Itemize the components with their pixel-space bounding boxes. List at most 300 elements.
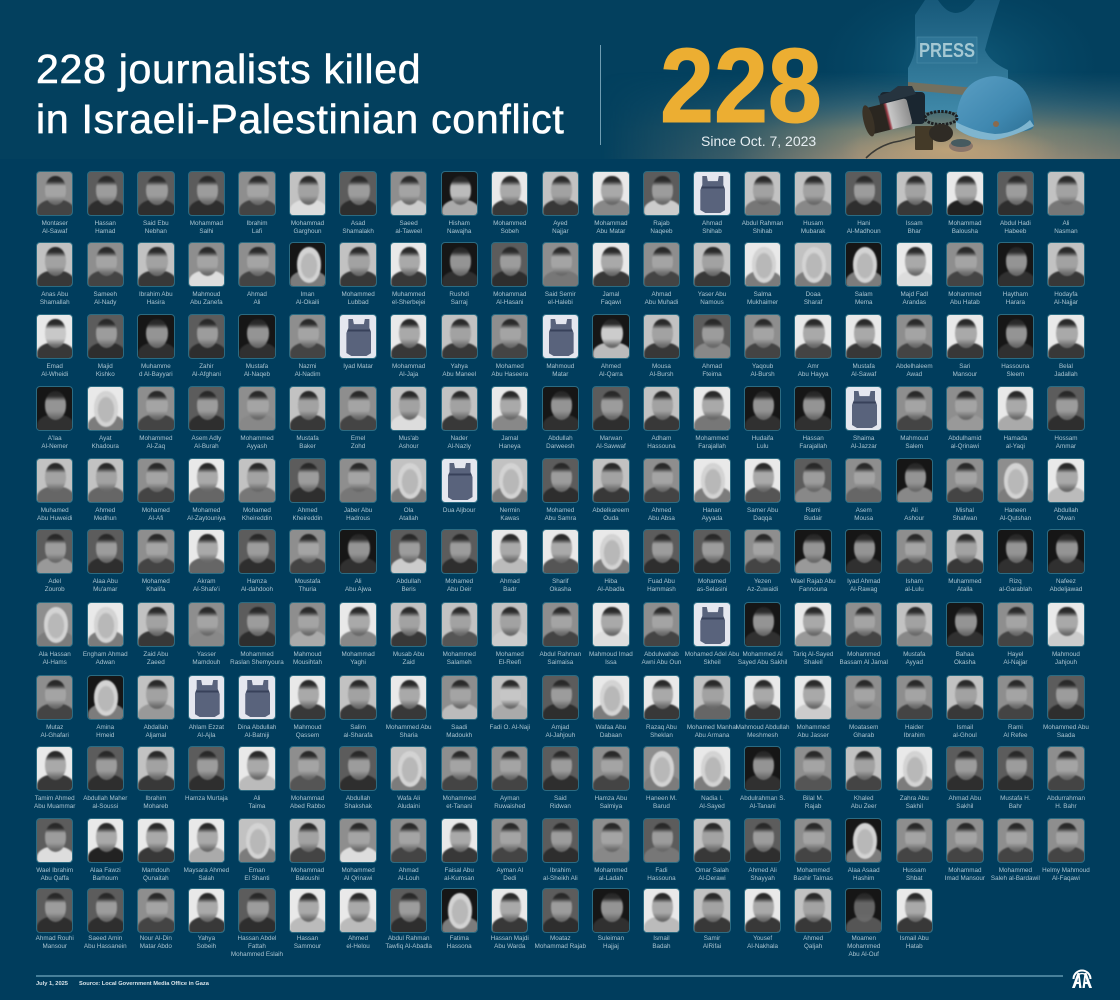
- card: Abdullah Olwan: Olwan: [1057, 515, 1075, 522]
- card: Ahmed el-Helou: el-Helou: [346, 943, 370, 950]
- card: Muhammed Atalla: Muhammed: [948, 578, 981, 585]
- card: Mohammed Abu Sharia: Sharia: [400, 732, 418, 739]
- card: Alaa Fawzi Barhoum: Alaa Fawzi: [90, 867, 121, 874]
- card: Asem Adly Al-Burah: Asem Adly: [192, 435, 221, 442]
- card: Ali Taima: Ali: [253, 795, 260, 802]
- card: Amjad Al-Jahjouh: Al-Jahjouh: [545, 732, 575, 739]
- header scene: press vest, helmet, camera on sand: [622, 0, 1120, 159]
- card: Dina Abdullah Al-Batniji: [238, 675, 276, 740]
- card: Mustafa H. Bahr: [997, 746, 1034, 811]
- card: Abdulhamid al-Qrinawi: Abdulhamid: [948, 435, 981, 442]
- card: Yasser Mamdouh: [188, 602, 225, 667]
- card: Samir AlRifai: [693, 888, 731, 959]
- card: Ahmed Abu Absa: Ahmed: [651, 507, 671, 514]
- card: Suleiman Hajjaj: Hajjaj: [603, 943, 619, 950]
- card: Anas Abu Shamallah: [36, 242, 73, 306]
- card: Engham Ahmad Adwan: Engham Ahmad: [83, 651, 128, 658]
- card: Maysara Ahmed Salah: Maysara Ahmed: [184, 867, 229, 874]
- card: Mahmoud Abdullah Meshmesh: Meshmesh: [747, 732, 778, 739]
- card: Husam Mubarak: Husam: [803, 220, 823, 227]
- card: Yezen Az-Zuwaidi: Az-Zuwaidi: [747, 586, 778, 593]
- card: Fatima Hassona: Hassona: [447, 943, 472, 950]
- card: Hussam Shbat: [896, 818, 933, 883]
- card: Rajab Naqeeb: Naqeeb: [650, 228, 672, 235]
- card: Mohammed Abu Jasser: Mohammed: [797, 724, 830, 731]
- card: Abdurrahman H. Bahr: Abdurrahman: [1047, 795, 1085, 802]
- card: Ali Abu Ajwa: [339, 529, 377, 594]
- card: Hassan Abdel Fattah Mohammed Eslaih: Fattah: [248, 943, 266, 950]
- card: Ahmad Abu Sakhil: Ahmad Abu: [949, 795, 981, 802]
- card: Hiba Al-Abadla: [592, 529, 630, 594]
- card: Asad Shamalakh: Shamalakh: [342, 228, 374, 235]
- card: Ahmad Al-Louh: Ahmad: [399, 867, 419, 874]
- card: Abdul Rahman Saimaisa: Abdul Rahman: [540, 651, 581, 658]
- card: Ayat Khadoura: [87, 386, 124, 451]
- card: Mutaz Al-Ghafari: [36, 675, 73, 740]
- card: Salim al-Sharafa: al-Sharafa: [344, 732, 373, 739]
- card: Sameeh Al-Nady: [87, 242, 124, 306]
- journalists row 2: [36, 242, 1085, 306]
- card: Mustafa H. Bahr: Mustafa H.: [1000, 795, 1031, 802]
- card: Eman El Shanti: El Shanti: [244, 875, 270, 882]
- card: Hassan Abdel Fattah Mohammed Eslaih: Hassan Abdel: [238, 935, 276, 942]
- card: Ayman Ruwaished: [491, 746, 528, 811]
- card: Mohammed Farajallah: Mohammed: [695, 435, 729, 442]
- card: A'laa Al-Nemer: [36, 386, 73, 451]
- card: Ayed Najjar: Ayed: [553, 220, 567, 227]
- card: Hisham Nawajha: Nawajha: [447, 228, 471, 235]
- card: Hassouna Sleem: Hassouna: [1001, 363, 1030, 370]
- card: Faisal Abu al-Kumsan: al-Kumsan: [444, 875, 474, 882]
- card: Mohammed Saleh al-Bardawil: [997, 818, 1034, 883]
- card: Muhammed Atalla: Atalla: [957, 586, 973, 593]
- card: Hisham Nawajha: [441, 171, 478, 235]
- card: Abdullah Beris: [390, 529, 427, 594]
- card: Salma Mukhaimer: Mukhaimer: [747, 299, 778, 306]
- card: Hossam Ammar: [1047, 386, 1085, 451]
- card: Abdullah Darweesh: Abdullah: [548, 435, 573, 442]
- card: Said Ridwan: [542, 746, 579, 811]
- card: Salam Mema: Mema: [855, 299, 872, 306]
- card: Ahmad Abu Muhadi: Abu Muhadi: [645, 299, 678, 306]
- card: Mohammed Salameh: [440, 602, 478, 667]
- card: Ahmed el-Helou: Ahmed: [348, 935, 368, 942]
- card: Hassan Majdi Abu Warda: [491, 888, 528, 959]
- card: Akram Al-Shafe'i: Al-Shafe'i: [193, 586, 220, 593]
- card: Isham al-Lulu: [896, 529, 933, 594]
- card: Ahmed Al-Qarra: [592, 314, 630, 379]
- card: Amr Abu Hayya: [794, 314, 832, 379]
- card: Ayat Khadoura: Ayat: [99, 435, 112, 442]
- card: Mahmoud Abu Zanefa: Abu Zanefa: [190, 299, 223, 306]
- card: Omar Salah Al-Derawi: Omar Salah: [695, 867, 729, 874]
- card: Haneen Al-Qutshan: [997, 458, 1034, 523]
- card: Said Semir el-Halebi: [542, 242, 579, 306]
- card: Ahmed Medhun: Ahmed: [95, 507, 115, 514]
- card: Mahmoud Mousihtah: [289, 602, 326, 667]
- card: Mohamed as-Selasini: Mohamed: [698, 578, 726, 585]
- footer source: Source: Local Government Media Office in Gaza: [79, 981, 209, 987]
- card: Ola Atallah: [390, 458, 427, 523]
- card: Mohammed Sobeh: [491, 171, 528, 235]
- card: Husam Mubarak: [794, 171, 832, 235]
- card: Mahmoud Salem: Salem: [905, 443, 923, 450]
- card: Mohammed Abu Saada: Mohammed Abu: [1043, 724, 1089, 731]
- card: Abdelhaleem Awad: Awad: [906, 371, 922, 378]
- card: Jamal Faqawi: [592, 242, 630, 306]
- card: Hani Al-Madhoun: Hani: [857, 220, 870, 227]
- card: Abdullah Maher al-Soussi: al-Soussi: [92, 803, 118, 810]
- card: Tariq Al-Sayed Shaleil: [794, 602, 832, 667]
- icon: compass: [949, 139, 973, 152]
- card: Fadi Hassouna: Hassouna: [647, 875, 676, 882]
- card: Mishal Shafwan: Shafwan: [953, 515, 977, 522]
- card: Bilal M. Rajab: Rajab: [805, 803, 821, 810]
- card: Mohammad Baloushi: [289, 818, 326, 883]
- card: Mustafa Al-Sawaf: Al-Sawaf: [851, 371, 876, 378]
- card: Ali Nasman: [1047, 171, 1085, 235]
- card: Mustafa H. Bahr: Bahr: [1009, 803, 1022, 810]
- card: A'laa Al-Nemer: A'laa: [48, 435, 62, 442]
- card: Ahmed Kheireddin: Ahmed: [298, 507, 317, 514]
- card: Muhammed Al-Bayyari: Muhamme: [141, 363, 171, 370]
- card: Yahya Sobeih: [188, 888, 225, 959]
- card: Nader Al-Nazly: [440, 386, 478, 451]
- card: Hassan Majdi Abu Warda: Hassan Majdi: [491, 935, 529, 942]
- card: Ahmed Ali Shayyah: [744, 818, 781, 883]
- card: Said Semir el-Halebi: el-Halebi: [548, 299, 573, 306]
- card: Moamen Mohammed Abu Al-Ouf: Abu Al-Ouf: [848, 951, 879, 958]
- card: Mohammad Abu Matar: Abu Matar: [596, 228, 625, 235]
- card: Moataz Mohammad Rajab: Moataz: [550, 935, 571, 942]
- card: Hamza Al-dahdooh: [238, 529, 276, 594]
- card: Mohammed Abu Jasser: [794, 675, 832, 740]
- card: Moatasem Gharab: [845, 675, 882, 740]
- card: Mohammed Raslan Shemyoura: Mohammed: [240, 651, 274, 658]
- card: Ola Atallah: Atallah: [399, 515, 418, 522]
- card: Akram Al-Shafe'i: Akram: [197, 578, 215, 585]
- journalists row 11: [36, 888, 1106, 959]
- card: Mohammad Abu Matar: Mohammad: [594, 220, 628, 227]
- card: Moataz Mohammad Rajab: Mohammad Rajab: [535, 943, 586, 950]
- card: Ahmad Shihab: Shihab: [702, 228, 722, 235]
- card: Mohamed El-Reefi: Mohamed: [496, 651, 524, 658]
- card: Muhammed el-Sherbejei: Muhammed: [392, 291, 425, 298]
- card: Abdullah Beris: Abdullah: [396, 578, 421, 585]
- card: Mohammad Abed Rabbo: Mohammad: [291, 795, 324, 802]
- card: Haytham Harara: Harara: [1006, 299, 1025, 306]
- card: Helmy Mahmoud Al-Faqawi: Al-Faqawi: [1052, 875, 1080, 882]
- card: Suleiman Hajjaj: [592, 888, 630, 959]
- card: Hassan Farajallah: Farajallah: [799, 443, 827, 450]
- card: Mohammed et-Tanani: [440, 746, 478, 811]
- card: Nafeez Abdeljawad: Abdeljawad: [1050, 586, 1082, 593]
- card: Zahir Al-Afghani: [188, 314, 225, 379]
- card: Wael Ibrahim Abu Qaffa: [36, 818, 73, 883]
- card: Mohammad Balousha: [946, 171, 984, 235]
- card: Mohammed Bassam Al Jamal: Bassam Al Jamal: [840, 659, 888, 666]
- card: Mahmoud Matar: Mahmoud: [546, 363, 574, 370]
- card: Mohamed Al-Zaytouniya: Al-Zaytouniya: [187, 515, 226, 522]
- card: Yahya Sobeih: Sobeih: [197, 943, 216, 950]
- card: Ahmad Abu Sakhil: [946, 746, 984, 811]
- card: Ali Nasman: Ali: [1062, 220, 1069, 227]
- card: Saeed al-Taweel: [390, 171, 427, 235]
- card: Ahmad Abu Muhadi: Ahmad: [651, 291, 671, 298]
- card: Ahmed Qaljah: Qaljah: [804, 943, 822, 950]
- card: Hassan Hamad: Hamad: [95, 228, 115, 235]
- card: Abdelkareem Ouda: Abdelkareem: [592, 507, 629, 514]
- since date: Since Oct. 7, 2023: [701, 133, 816, 149]
- card: Mustafa Baker: Mustafa: [296, 435, 319, 442]
- card: Omar Salah Al-Derawi: Al-Derawi: [698, 875, 726, 882]
- card: Ibrahim al-Sheikh Ali: Ibrahim: [550, 867, 571, 874]
- card: Adham Hassouna: Adham: [651, 435, 671, 442]
- card: Ismail Badah: Badah: [652, 943, 671, 950]
- card: Ayat Khadoura: Khadoura: [92, 443, 119, 450]
- card: Engham Ahmad Adwan: Adwan: [96, 659, 115, 666]
- card: Fatima Hassona: Fatima: [450, 935, 469, 942]
- card: Belal Jadallah: Jadallah: [1054, 371, 1078, 378]
- card: Mahmoud Jahjouh: [1047, 602, 1085, 667]
- card: Iyad Matar: Iyad Matar: [343, 363, 373, 370]
- card: Yahya Abu Maneel: Yahya: [450, 363, 468, 370]
- card: Montaser Al-Sawaf: Al-Sawaf: [42, 228, 67, 235]
- card: Fadi O. Al-Naji: [491, 675, 528, 740]
- card: Marwan Al-Sawwaf: [592, 386, 630, 451]
- card: Samer Abu Daqqa: Samer Abu: [747, 507, 778, 514]
- card: Saeed al-Taweel: al-Taweel: [395, 228, 422, 235]
- card: Hassan Hamad: Hassan: [95, 220, 116, 227]
- card: Mustafa Al-Naqeb: Mustafa: [246, 363, 268, 370]
- card: Mohammed Al Qrinawi: Al Qrinawi: [344, 875, 372, 882]
- icon: AA logo: [1070, 965, 1094, 989]
- card: Jaber Abu Hadrous: Hadrous: [346, 515, 370, 522]
- card: Mohamed Abu Samra: [542, 458, 579, 523]
- card: Marwan Al-Sawwaf: Marwan: [600, 435, 622, 442]
- journalists row 10: [36, 818, 1106, 883]
- card: Dina Abdullah Al-Batniji: Dina Abdullah: [238, 724, 276, 731]
- card: Nour Al-Din Matar Abdo: Matar Abdo: [140, 943, 172, 950]
- card: Moustafa Thuria: Moustafa: [295, 578, 320, 585]
- header band: [0, 0, 1120, 159]
- card: Hudaifa Lulu: [744, 386, 781, 451]
- card: Wael Ibrahim Abu Qaffa: Abu Qaffa: [41, 875, 69, 882]
- card: Abdurrahman H. Bahr: [1047, 746, 1085, 811]
- card: Rajab Naqeeb: Rajab: [653, 220, 670, 227]
- card: Ahmad Al-Louh: [390, 818, 427, 883]
- card: Hassouna Sleem: [997, 314, 1034, 379]
- card: Iyad Ahmad Al-Rawag: Iyad Ahmad: [847, 578, 880, 585]
- card: Mohamed Abu Haseera: Mohamed: [496, 363, 524, 370]
- card: Mohammed Lubbad: Mohammed: [341, 291, 375, 298]
- card: Ibrahim Abu Hasira: [137, 242, 175, 306]
- card: Mohammed Bassam Al Jamal: [845, 602, 882, 667]
- card: Hamza Murtaja: [188, 746, 225, 811]
- card: Mustafa Al-Sawaf: [845, 314, 882, 379]
- card: Razaq Abu Sheklan: Razaq Abu: [646, 724, 677, 731]
- card: Issam Bhar: [896, 171, 933, 235]
- card: Yezen Az-Zuwaidi: [744, 529, 781, 594]
- card: Nadia I. Al-Sayed: [693, 746, 731, 811]
- card: Hayel Al-Najjar: Hayel: [1007, 651, 1023, 658]
- card: Emad Al-Wheidi: Al-Wheidi: [41, 371, 68, 378]
- card: Mohammed Raslan Shemyoura: [238, 602, 276, 667]
- card: Mohammed Sobeh: Sobeh: [501, 228, 519, 235]
- title: [36, 46, 565, 142]
- card: Mustafa Baker: [289, 386, 326, 451]
- card: Mohammad Garghoun: Mohammad: [291, 220, 324, 227]
- card: Ahmad Fteima: Ahmad: [702, 363, 722, 370]
- journalists row 4: [36, 386, 1106, 451]
- card: Jamal Haneya: Jamal: [501, 435, 518, 442]
- journalists row 9: [36, 746, 1106, 811]
- card: Haneen M. Barud: Haneen M.: [646, 795, 677, 802]
- card: Ala Hassan Al-Hams: [36, 602, 73, 667]
- card: Sameeh Al-Nady: Al-Nady: [94, 299, 116, 306]
- card: Ahmed Abu Absa: [643, 458, 680, 523]
- card: Yaqoub Al-Bursh: [744, 314, 781, 379]
- card: Ahmad Al-Louh: Al-Louh: [398, 875, 420, 882]
- journalists row 6: [36, 529, 1106, 594]
- card: Ali Abu Ajwa: Ali: [355, 578, 362, 585]
- card: Mahmoud Jahjouh: Mahmoud: [1052, 651, 1080, 658]
- card: Asem Mousa: Mousa: [854, 515, 873, 522]
- card: Nour Al-Din Matar Abdo: [137, 888, 175, 959]
- card: Zahra Abu Sakhil: Zahra Abu: [900, 795, 929, 802]
- card: Salma Mukhaimer: Salma: [754, 291, 772, 298]
- card: Zaid Abu Zaeed: Zaid Abu: [143, 651, 168, 658]
- card: Mohammed Abu Hatab: [946, 242, 984, 307]
- journalists row 3: [36, 314, 1106, 379]
- card: Wael Rajab Abu Fannouna: Fannouna: [799, 586, 827, 593]
- card: Mohammed al-Ladah: Mohammed: [594, 867, 628, 874]
- footer date: July 1, 2025: [36, 981, 68, 987]
- card: Abdullah Shakshak: Shakshak: [344, 803, 372, 810]
- card: Jamal Faqawi: Faqawi: [601, 299, 621, 306]
- card: Moustafa Thuria: [289, 529, 326, 594]
- title: 228 journalists killed: [36, 46, 421, 92]
- card: Alaa Asaad Hashim: Hashim: [853, 875, 874, 882]
- card: Mohammed Al Sayed Abu Sakhil: Sayed Abu Sakhil: [738, 659, 787, 666]
- card: Salam Mema: Salam: [855, 291, 873, 298]
- card: Wafaa Abu Dabaan: Wafaa Abu: [596, 724, 626, 731]
- card: Haneen Al-Qutshan: Al-Qutshan: [1000, 515, 1031, 522]
- card: Ahmed Qaljah: Ahmed: [803, 935, 823, 942]
- card: Nadia I. Al-Sayed: Al-Sayed: [699, 803, 725, 810]
- card: Mohammed Lubbad: Lubbad: [348, 299, 369, 306]
- card: Bahaa Okasha: Okasha: [954, 659, 976, 666]
- card: Rushdi Sarraj: Rushdi: [449, 291, 469, 298]
- card: Majid Kishko: Majid: [98, 363, 113, 370]
- card: Ismail Badah: Ismail: [653, 935, 670, 942]
- card: Abdulrahman S. Al-Tanani: Abdulrahman S.: [740, 795, 785, 802]
- card: Saadi Madoukh: [440, 675, 478, 740]
- card: Hani Al-Madhoun: [845, 171, 882, 235]
- card: Emel Zohd: [339, 386, 377, 451]
- journalists row 8: [36, 675, 1106, 740]
- card: Zahra Abu Sakhil: Sakhil: [906, 803, 923, 810]
- card: Ahmed Ali Shayyah: Ahmed Ali: [748, 867, 777, 874]
- card: Ismail Abu Hatab: Hatab: [906, 943, 923, 950]
- card: Mohammad Salhi: Salhi: [199, 228, 213, 235]
- card: Muhamed Abu Huweidi: Abu Huweidi: [37, 515, 72, 522]
- card: Salam Mema: [845, 242, 882, 307]
- card: Mohammad Al-Jaja: Mohammad: [392, 363, 425, 370]
- card: Anas Abu Shamallah: Shamallah: [40, 299, 70, 306]
- card: Fuad Abu Hammash: Hammash: [647, 586, 676, 593]
- card: Mohammed Ayyash: Ayyash: [247, 443, 267, 450]
- card: Wafaa Abu Dabaan: [592, 675, 630, 740]
- card: Abdulhamid al-Qrinawi: [946, 386, 984, 451]
- card: Mahmoud Matar: Matar: [552, 371, 568, 378]
- card: Yezen Az-Zuwaidi: Yezen: [754, 578, 771, 585]
- card: Saeed Amin Abu Hassanein: Saeed Amin: [88, 935, 122, 942]
- card: Abdullah Darweesh: [542, 386, 579, 451]
- card: Mohammed Salameh: Mohammed: [443, 651, 476, 658]
- card: Mohammad Yaghi: Yaghi: [350, 659, 366, 666]
- card: Musab Abu Zaid: Zaid: [403, 659, 415, 666]
- card: Mustafa Al-Naqeb: Al-Naqeb: [244, 371, 270, 378]
- card: Ahmad Rouhi Mansour: [36, 888, 73, 959]
- card: Ibrahim al-Sheikh Ali: [542, 818, 579, 883]
- card: Mohammad Salhi: Mohammad: [190, 220, 223, 227]
- card: Samer Abu Daqqa: [744, 458, 781, 523]
- card: Rami Al Refee: [997, 675, 1034, 740]
- card: Mahmoud Matar: [542, 314, 579, 379]
- card: Hassan Sammour: [289, 888, 326, 959]
- card: Tamim Ahmed Abu Muammar: Tamim Ahmed: [35, 795, 75, 802]
- card: Abdullah Shakshak: [339, 746, 377, 811]
- card: Mohammad Al-Hasani: Al-Hasani: [496, 299, 523, 306]
- card: A'laa Al-Nemer: Al-Nemer: [41, 443, 68, 450]
- card: Bahaa Okasha: [946, 602, 984, 667]
- card: Mamdouh Qunaitah: [137, 818, 175, 883]
- card: Mustafa Al-Naqeb: [238, 314, 276, 379]
- card: Majd Fadl Arandas: Arandas: [903, 299, 926, 306]
- card: Mohammad Garghoun: [289, 171, 326, 235]
- card: Mohammed Ayyash: Mohammed: [240, 435, 274, 442]
- card: Mohammad Imad Mansour: Mohammad: [948, 867, 981, 874]
- card: Ahmad Fteima: Fteima: [702, 371, 722, 378]
- card: Razaq Abu Sheklan: Sheklan: [650, 732, 673, 739]
- card: Mohammad Al-Jaja: Al-Jaja: [399, 371, 418, 378]
- card: Samer Abu Daqqa: Daqqa: [753, 515, 772, 522]
- card: Ayman Ruwaished: Ruwaished: [494, 803, 525, 810]
- card: Musab Abu Zaid: Musab Abu: [393, 651, 424, 658]
- card: Abdallah Aljamal: Abdallah: [144, 724, 168, 731]
- card: Nermin Kawas: Nermin: [500, 507, 520, 514]
- card: Nader Al-Nazly: Nader: [451, 435, 468, 442]
- card: Alaa Fawzi Barhoum: Barhoum: [92, 875, 118, 882]
- card: Bilal M. Rajab: [794, 746, 832, 811]
- card: Zaid Abu Zaeed: [137, 602, 175, 667]
- card: Rizq al-Garablah: [997, 529, 1034, 594]
- card: Hassouna Sleem: Sleem: [1006, 371, 1024, 378]
- card: Nazmi Al-Nadim: Al-Nadim: [295, 371, 320, 378]
- card: Mohamed Kheireddin: Mohamed: [243, 507, 271, 514]
- card: Abdul Hadi Habeeb: Abdul Hadi: [1000, 220, 1031, 227]
- card: Mohammad Yaghi: Mohammad: [341, 651, 375, 658]
- card: Ahmad Fteima: [693, 314, 731, 379]
- card: Ahmad Badr: Badr: [503, 586, 516, 593]
- card: Mohammad Yaghi: [339, 602, 377, 667]
- card: Ibrahim Mohareb: Ibrahim: [145, 795, 166, 802]
- card: Mohammed et-Tanani: et-Tanani: [446, 803, 472, 810]
- icon: helmet: [956, 76, 1034, 140]
- card: Mohamed Adel Abu Skheil: Skheil: [703, 659, 721, 666]
- card: Mohammed Raslan Shemyoura: Raslan Shemyoura: [230, 659, 284, 666]
